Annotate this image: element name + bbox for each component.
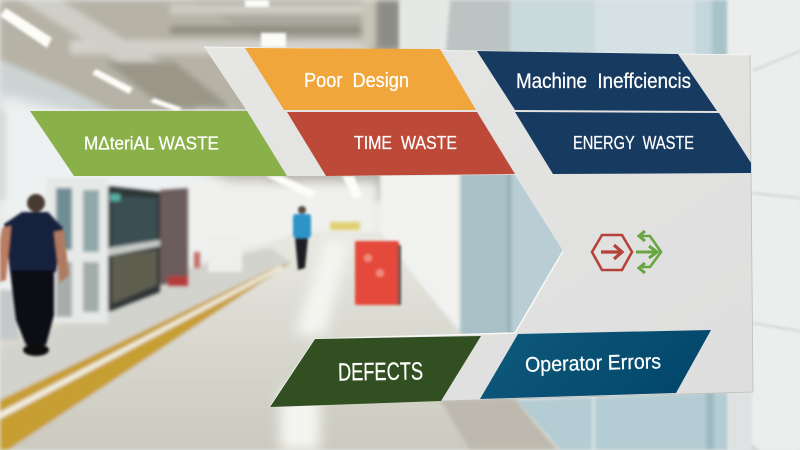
panel: defects [270,336,481,407]
panel: material waste [30,110,287,176]
panel: operator errors [480,330,711,399]
panel: operator errors: Operator Errors [525,350,661,377]
ceiling lights [0,0,362,199]
floor [0,232,560,450]
right corridor wall and doors [380,0,728,450]
panel: energy waste [515,112,751,174]
panel: defects: DEFECTS [338,357,423,387]
ceiling [0,0,400,202]
panel: energy waste: ENERGY WASTE [573,132,694,153]
panel: poor design [245,48,476,110]
panel: poor design: Poor Design [304,69,409,92]
background glass doors [0,178,360,340]
panel: time waste [287,112,515,176]
floor reflections [280,240,350,450]
background worker in blue [293,206,311,270]
red bin [355,241,401,305]
panel: material waste: MΔteriAL WASTE [84,132,219,154]
left white wall [0,95,380,300]
panel: machine inefficiencies: Machine Ineffciencis [516,70,691,93]
sign board [30,47,753,407]
background worker in navy [0,194,69,356]
panel: machine inefficiencies [477,51,717,111]
icon: hexagon arrow and branching arrows [592,231,661,273]
right tiled wall [728,0,800,450]
panel: time waste: TIME WASTE [354,132,457,153]
